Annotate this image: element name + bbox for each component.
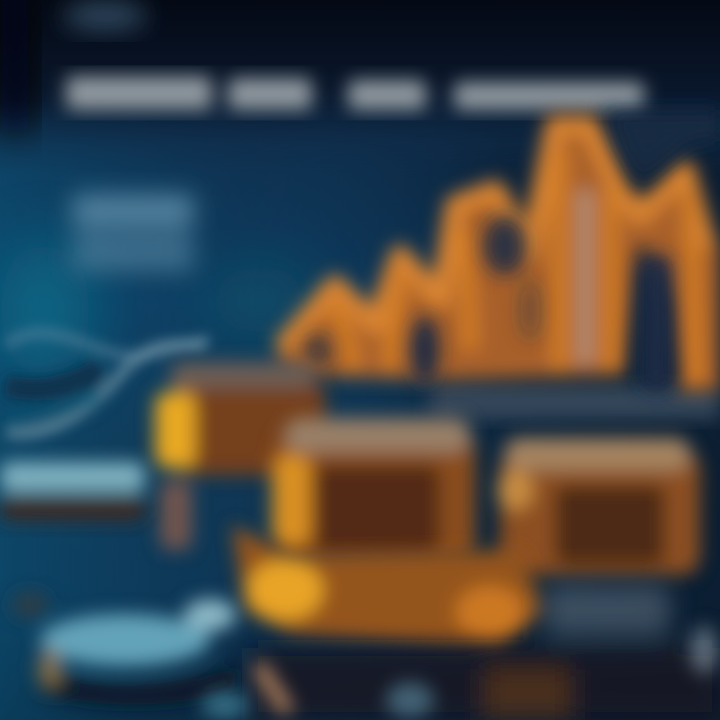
text block (illegible, blurred)	[72, 194, 194, 272]
coin: bottom left pale disc	[12, 593, 236, 705]
coin: right	[497, 438, 700, 575]
coin: center	[272, 418, 475, 560]
coin: left pale disc	[0, 462, 145, 520]
wave lines	[6, 333, 210, 433]
dark gaps between the orange chart strokes	[304, 110, 720, 390]
coin: upper left	[155, 362, 325, 550]
orange line chart	[275, 115, 720, 392]
bottom reflections	[201, 626, 718, 719]
dark chart base	[430, 385, 720, 419]
dark lower foreground	[250, 585, 720, 720]
title bar (illegible, blurred)	[66, 76, 644, 110]
coin: lower stack	[232, 525, 545, 650]
